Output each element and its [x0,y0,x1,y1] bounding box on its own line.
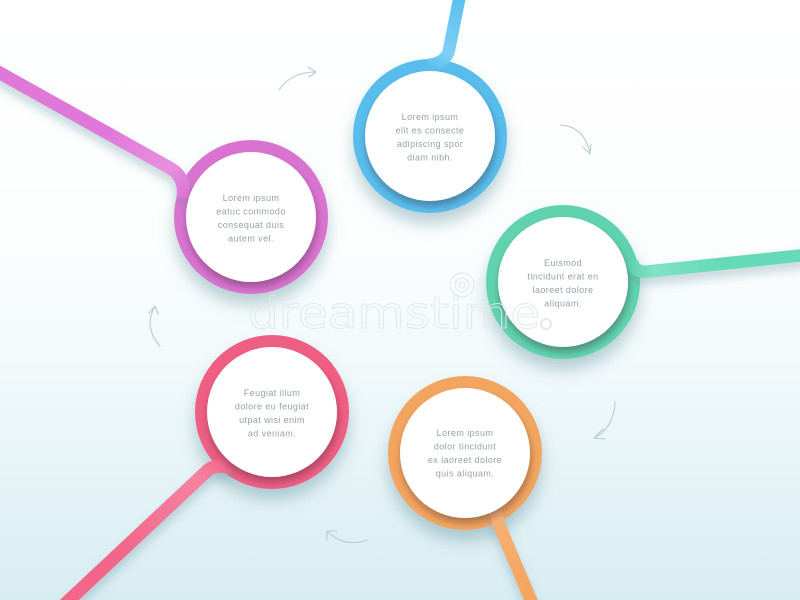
purple text: Lorem ipsum [223,193,279,203]
orange text: ex laoreet dolore [428,455,502,465]
purple text: autem vel. [228,234,274,244]
pink ring [195,335,349,489]
green text: tincidunt erat en [527,272,599,282]
blue leader line [428,0,460,65]
orange ring [388,376,542,530]
purple text: consequat duis [218,220,284,230]
blue ring [353,59,507,213]
green text: laoreet dolore [533,285,593,295]
green text: aliquam. [544,298,582,308]
pink text: Feugiat illum [244,388,300,398]
pink text: ad veniam. [248,428,296,438]
purple text: eatuc commodo [216,206,286,216]
panel: pink step [64,335,349,600]
blue text: elit es consecte [396,126,464,136]
arrow: green to orange [594,402,615,439]
green ring [486,205,640,359]
green leader line [632,255,800,272]
orange text: quis aliquam. [436,468,494,478]
pink text: dolore eu feugiat [235,402,309,412]
orange leader line [496,510,533,600]
blue disc [365,71,495,201]
watermark: dreamstime [248,288,540,339]
pink disc [207,347,337,477]
panel: orange step [388,376,542,600]
blue text: diam nibh. [407,152,453,162]
panel: purple step [0,70,328,294]
green text: Euismod [544,258,582,268]
green disc [498,217,628,347]
pink text: utpat wisi enim [239,415,305,425]
arrow: orange to pink [327,531,367,543]
pink leader line [64,466,232,600]
orange text: dolor tincidunt [434,442,496,452]
watermark [248,273,551,339]
orange text: Lorem ipsum [437,428,493,438]
arrow: blue to green [560,125,591,154]
panel: blue step [353,0,507,213]
purple disc [186,152,316,282]
blue text: Lorem ipsum [402,112,458,122]
arrow: purple to blue [279,67,316,90]
purple ring [174,140,328,294]
blue text: adipiscing spor [397,139,463,149]
orange disc [400,388,530,518]
panel: green step [486,205,800,359]
arrow: pink to purple [149,306,160,346]
purple leader line [0,70,183,198]
